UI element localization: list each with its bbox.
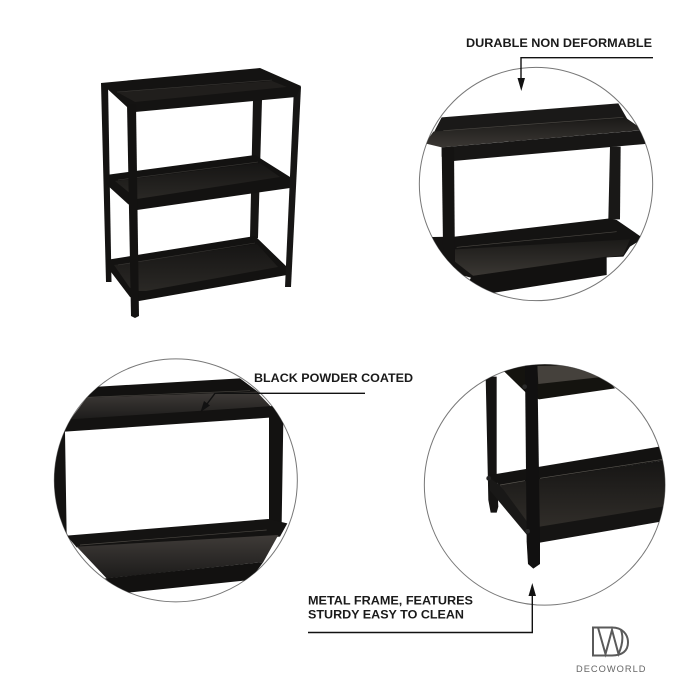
top shelf — [101, 68, 301, 112]
logo mark — [593, 628, 628, 656]
logo: decoworld — [576, 628, 646, 674]
front right leg — [285, 87, 301, 287]
front left leg — [127, 104, 139, 318]
middle shelf — [106, 155, 290, 210]
label: black powder coated: BLACK POWDER COATED — [254, 372, 413, 385]
label: durable non deformable: DURABLE NON DEFORMABLE — [466, 37, 652, 50]
label: metal frame, features sturdy easy to clean — [308, 594, 473, 622]
product photo: three-tier black metal shelf — [101, 68, 301, 318]
detail circle: top shelf — [417, 67, 653, 301]
label: metal frame, features sturdy easy to clean: STURDY EASY TO CLEAN — [308, 608, 464, 622]
bottom shelf — [106, 236, 287, 301]
detail circle: black powder coated — [50, 359, 297, 602]
label: metal frame, features sturdy easy to clean: METAL FRAME, FEATURES — [308, 594, 473, 608]
back left leg — [101, 83, 112, 282]
arrow: durable non deformable — [518, 58, 653, 91]
detail circle: leg and bottom shelf — [424, 363, 667, 605]
logo wordmark: DECOWORLD — [576, 664, 646, 674]
arrow: black powder coated — [200, 393, 365, 412]
arrow: metal frame — [308, 583, 536, 632]
back right leg — [250, 100, 262, 238]
